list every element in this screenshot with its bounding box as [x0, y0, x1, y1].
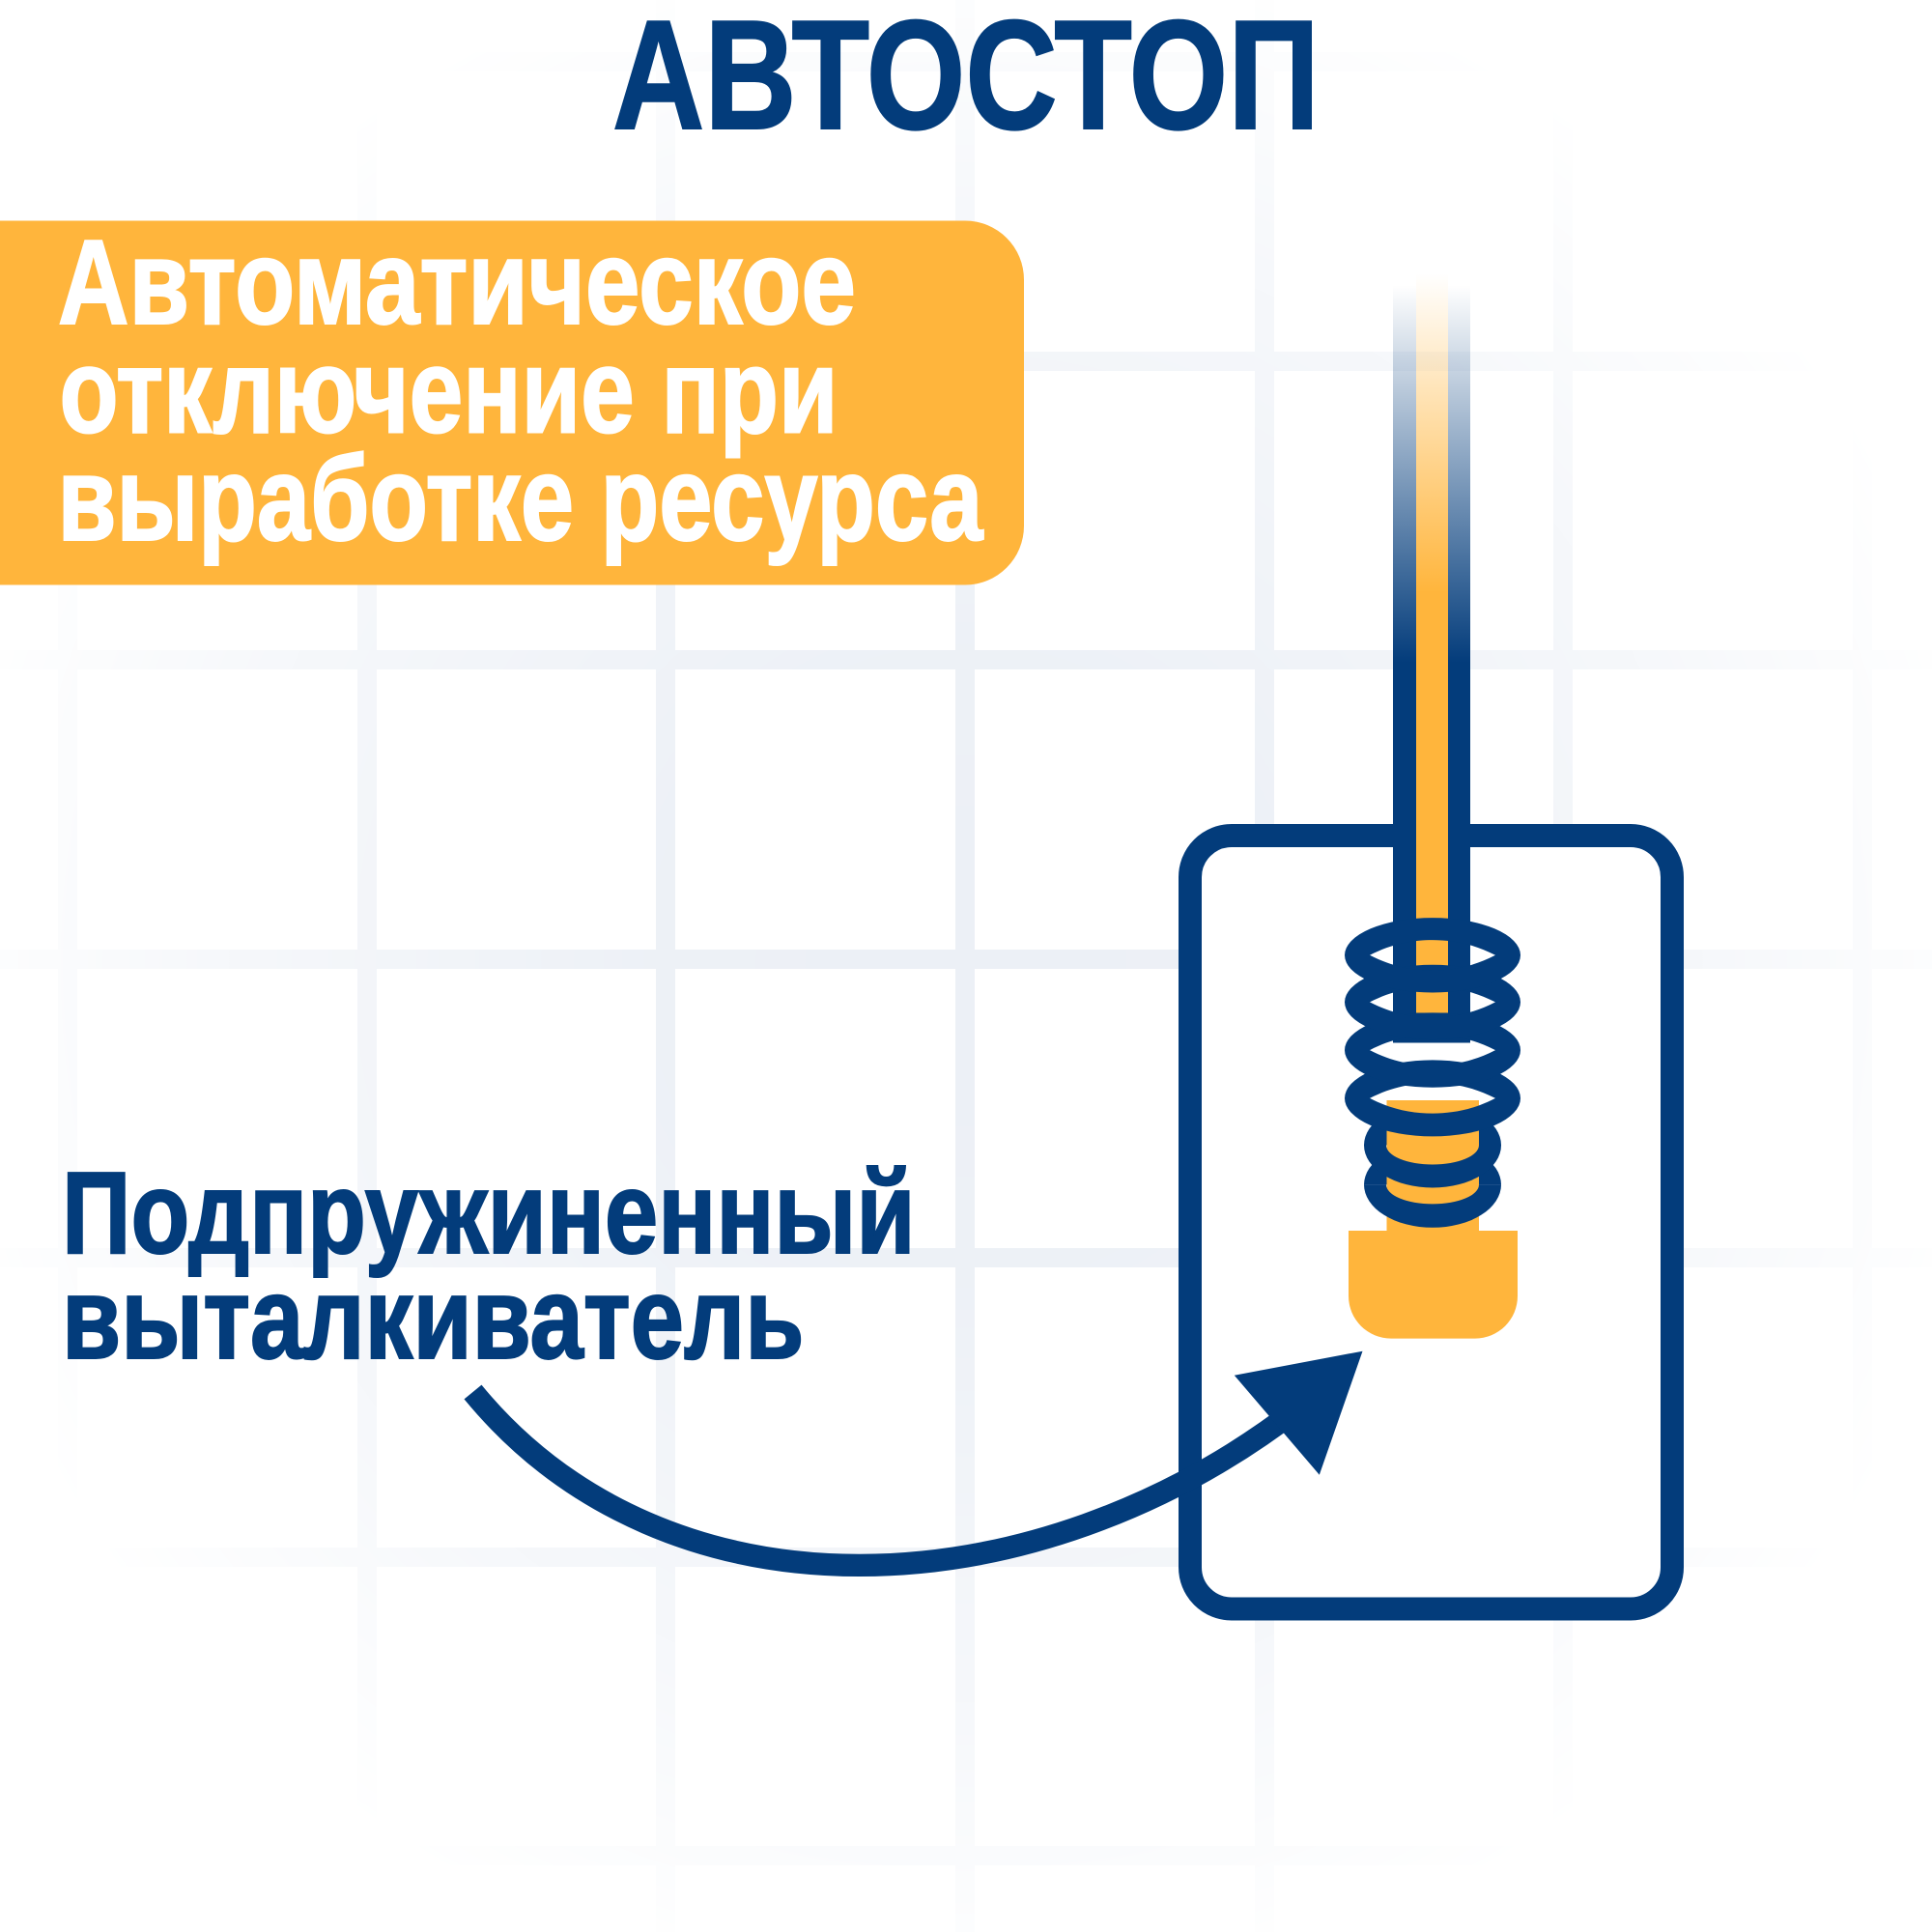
- stem core: [1416, 591, 1448, 1013]
- stem core fading top: [1416, 273, 1448, 593]
- arrow: from label to spring: [473, 1351, 1362, 1565]
- label: spring ejector: выталкиватель: [62, 1252, 804, 1383]
- cartridge housing: [1190, 836, 1672, 1609]
- diagram: cartridge body with plunger and spring: [1190, 273, 1672, 1609]
- banner text: выработке ресурса: [58, 433, 983, 566]
- panel: orange description banner: [0, 216, 1024, 585]
- banner text: Автоматическое: [58, 216, 856, 350]
- spring: wide coils: [1345, 918, 1520, 1136]
- arrow shaft: [473, 1392, 1299, 1565]
- stem walls fading top: [1393, 285, 1470, 663]
- arrow head: [1235, 1351, 1362, 1475]
- stem walls with end cap: [1393, 662, 1470, 1043]
- spring: narrow coils, upper halves behind plunger: [1364, 1103, 1501, 1184]
- label: spring ejector: [62, 1147, 916, 1383]
- banner text: [58, 216, 983, 566]
- label: spring ejector: Подпружиненный: [62, 1147, 916, 1278]
- spring: narrow coils, lower halves over plunger: [1364, 1146, 1501, 1228]
- plunger with base: [1349, 1100, 1518, 1339]
- banner background: [0, 220, 1024, 585]
- banner text: отключение при: [60, 325, 838, 458]
- infographic canvas: [0, 19, 1735, 1735]
